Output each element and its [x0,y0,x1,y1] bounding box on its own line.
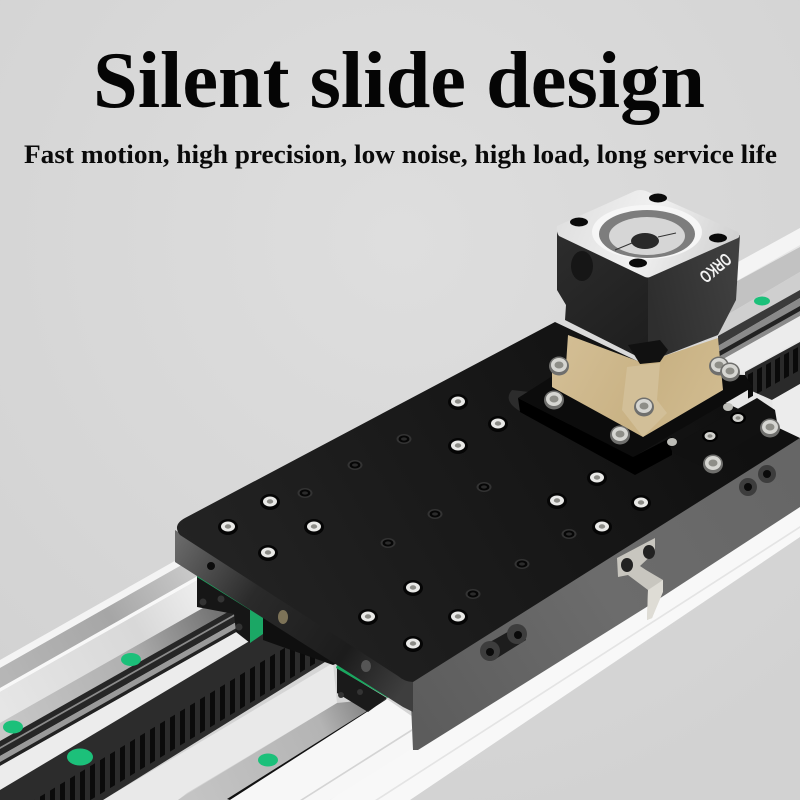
gold housing [552,335,723,437]
title: Silent slide design [93,37,705,125]
plate cutout edge [509,390,600,432]
near rack [0,633,330,800]
logo: ORKO [696,249,735,287]
top flange [557,190,740,278]
large green dot [67,748,93,766]
flange holes [570,218,588,226]
green dot [258,754,278,766]
near carriage [197,573,263,643]
side wall bolts [480,465,776,661]
far carriage [336,665,388,712]
green dot [3,720,23,734]
adjuster block [667,398,777,467]
slide plate [175,322,800,750]
gearbox bolts [544,356,780,474]
mounting screws [218,394,651,652]
gearbox [544,190,780,474]
side wall [410,438,800,750]
subtitle: Fast motion, high precision, low noise, high load, long service life [24,140,777,169]
near rail assembly [0,505,800,800]
second rail [178,698,388,800]
motor mount plate [518,370,777,475]
far rail section [715,228,800,440]
outer extrusion [0,524,240,723]
black body [557,228,740,364]
front hole [207,562,215,570]
far rack [745,342,800,400]
green dot [121,653,141,666]
near linear rail [0,587,270,790]
threaded holes [298,434,576,599]
metal clip [617,538,663,620]
white extrusion [230,699,413,800]
front hole [361,660,371,672]
white channel [103,663,337,800]
long base strip [330,505,800,800]
front edge [175,530,413,712]
front set screw [278,610,288,624]
top face [177,322,800,682]
shadow under plate [263,612,345,665]
green rail dot [754,296,770,306]
